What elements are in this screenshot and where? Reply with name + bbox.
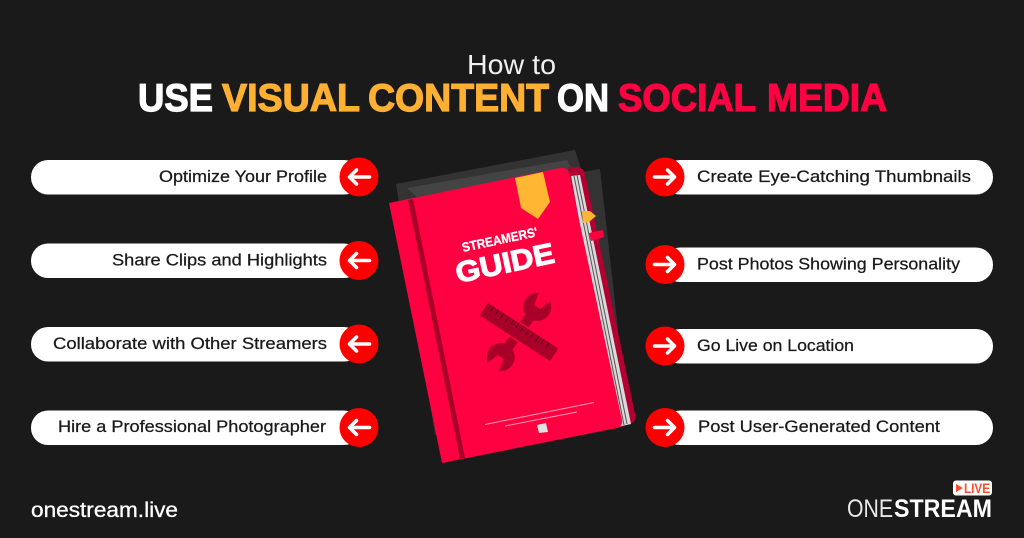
title: main heading: CONTENT	[368, 77, 549, 120]
ruler	[478, 301, 560, 363]
tip: post photos showing personality: Post Photos Showing Personality	[697, 256, 961, 274]
cover heading: STREAMERS'	[461, 224, 539, 255]
title: main heading: SOCIAL	[618, 77, 756, 120]
title: main heading	[138, 77, 887, 120]
tip: share clips and highlights	[31, 241, 378, 280]
cover heading: GUIDE	[453, 238, 557, 290]
cover strap	[408, 199, 465, 459]
tip: optimize your profile: Optimize Your Profile	[159, 168, 327, 186]
live badge: LIVE	[964, 481, 990, 496]
logo: onestream live	[847, 480, 992, 523]
tip: create eye-catching thumbnails	[646, 158, 993, 196]
icon: streamers guide book	[389, 150, 635, 463]
tip: collaborate with other streamers	[31, 324, 378, 364]
tip: optimize your profile	[31, 158, 378, 196]
tip: share clips and highlights: Share Clips and Highlights	[112, 252, 327, 270]
tip: hire a professional photographer: Hire a Professional Photographer	[58, 418, 327, 436]
icon: wrench and ruler	[478, 287, 560, 377]
tip: post user-generated content	[646, 408, 993, 447]
page tab: red	[589, 230, 604, 241]
pages	[571, 175, 631, 427]
tip: go live on location	[646, 326, 993, 366]
page tab: yellow	[582, 211, 596, 223]
title: main heading: VISUAL	[222, 77, 360, 120]
tip: collaborate with other streamers: Collaborate with Other Streamers	[53, 335, 327, 353]
logo: onestream live: STREAM	[894, 495, 992, 523]
title: main heading: MEDIA	[767, 77, 887, 120]
title: main heading: USE	[138, 77, 213, 120]
tip: go live on location: Go Live on Location	[697, 337, 854, 355]
back cover	[568, 167, 635, 428]
title: how to: How to	[467, 49, 556, 80]
website url: onestream.live	[31, 499, 178, 522]
panel: left tips	[31, 158, 378, 447]
book cover	[389, 168, 622, 463]
tip: post user-generated content: Post User-Generated Content	[698, 418, 940, 436]
title: main heading: ON	[557, 77, 609, 120]
cover footer square	[537, 423, 548, 433]
bookmark	[515, 172, 550, 219]
title	[138, 49, 887, 120]
tip: post photos showing personality	[646, 245, 993, 284]
panel: right tips	[646, 158, 993, 447]
wordmark: ONE	[847, 495, 893, 523]
live badge	[953, 480, 992, 496]
cover footer lines	[485, 402, 594, 426]
tip: create eye-catching thumbnails: Create Eye-Catching Thumbnails	[697, 168, 971, 186]
tip: hire a professional photographer	[31, 408, 378, 447]
wrench	[481, 287, 557, 377]
back sheets	[396, 150, 625, 435]
